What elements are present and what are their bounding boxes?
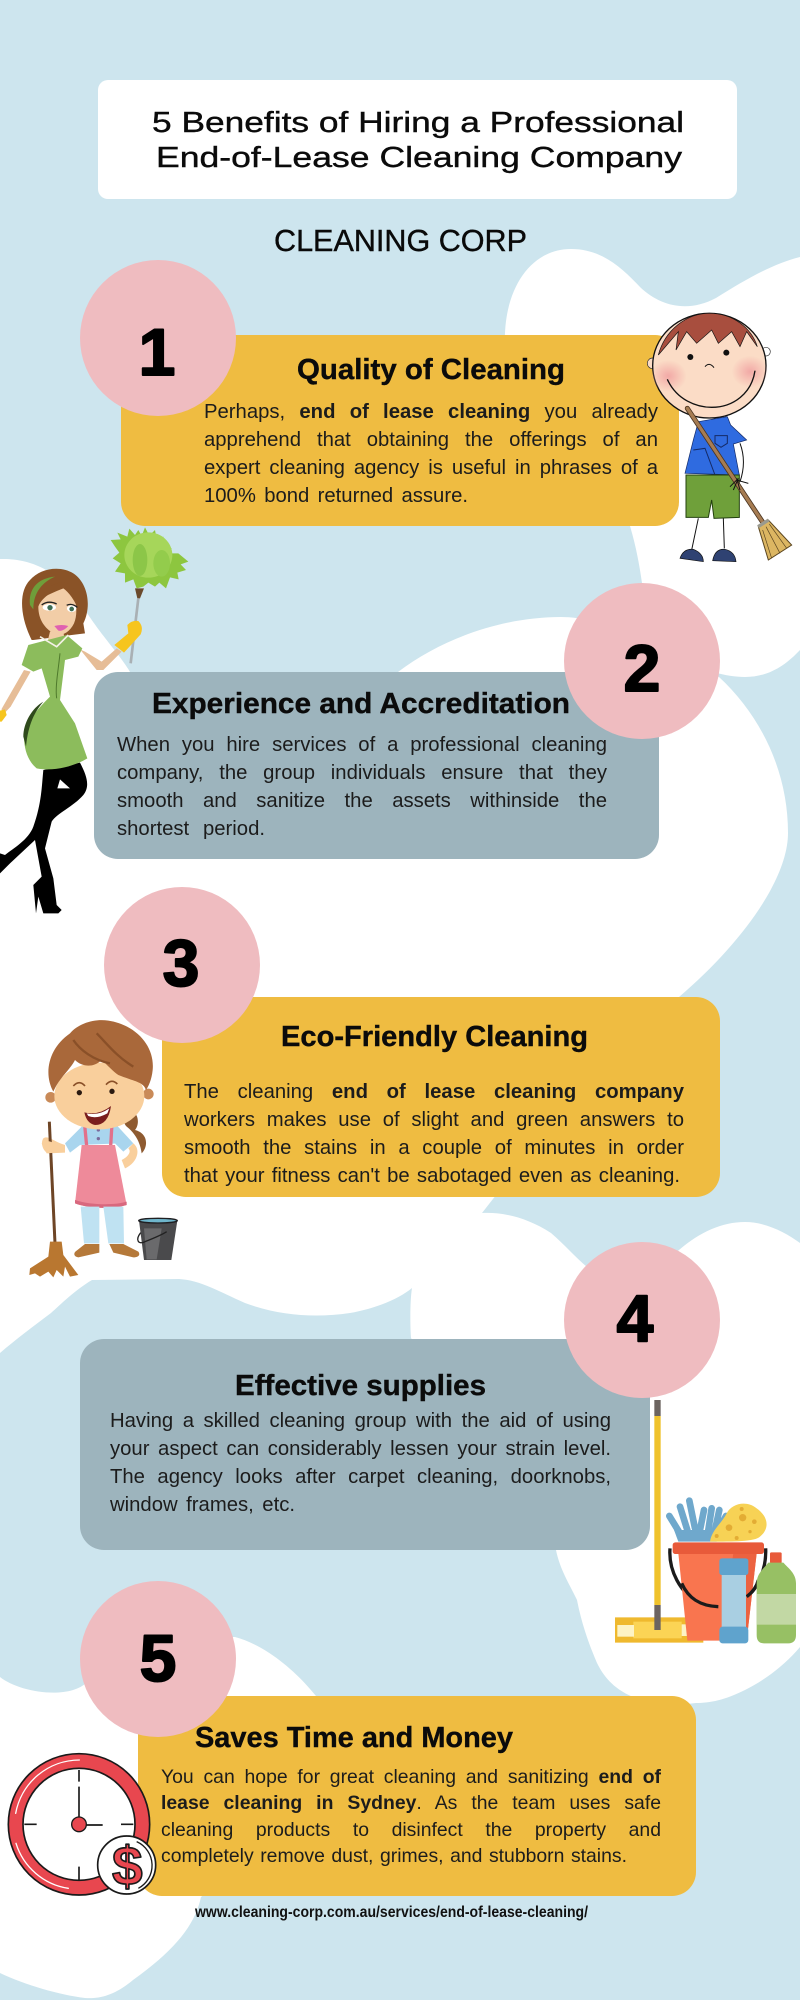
text: experience and accreditation (117, 734, 607, 840)
icon: clock with dollar coin: $ (112, 1835, 143, 1897)
text: quality of cleaning (204, 401, 658, 507)
number badge 1 (80, 260, 236, 416)
number badge 4: 4 (617, 1281, 654, 1355)
website url: www.cleaning-corp.com.au/services/end-of-lease-cleaning/ (194, 1904, 589, 1921)
panel: experience and accreditation (94, 672, 659, 859)
text: effective supplies: window frames, etc. (110, 1494, 295, 1516)
text: eco-friendly cleaning (184, 1081, 684, 1187)
heading: saves time and money: Saves Time and Money (195, 1722, 513, 1754)
text: eco-friendly cleaning: The cleaning end of lease cleaning company (184, 1081, 684, 1103)
text: saves time and money: lease cleaning in Sydney. As the team uses safe (161, 1792, 661, 1814)
panel: eco-friendly cleaning (162, 997, 720, 1197)
panel: effective supplies (80, 1339, 650, 1550)
number badge 2: 2 (624, 631, 660, 705)
text: eco-friendly cleaning: workers makes use of slight and green answers to (184, 1109, 684, 1131)
text: eco-friendly cleaning: smooth the stains in a couple of minutes in order (184, 1137, 684, 1159)
text: saves time and money (161, 1766, 661, 1867)
panel: quality of cleaning (121, 335, 679, 526)
text: experience and accreditation: shortest period. (117, 818, 265, 840)
illustration: mop, bucket and cleaning supplies (615, 1400, 796, 1644)
heading: effective supplies: Effective supplies (235, 1370, 486, 1402)
text: effective supplies: The agency looks after carpet cleaning, doorknobs, (110, 1466, 611, 1488)
text: experience and accreditation: smooth and sanitize the assets withinside the (117, 790, 607, 812)
heading: experience and accreditation: Experience and Accreditation (152, 688, 570, 720)
text: effective supplies: Having a skilled cleaning group with the aid of using (110, 1410, 611, 1432)
brand name: CLEANING CORP (274, 223, 527, 258)
text: experience and accreditation: company, the group individuals ensure that they (117, 762, 607, 784)
number badge 3 (104, 887, 260, 1043)
text: quality of cleaning: apprehend that obtaining the offerings of an (204, 429, 658, 451)
number badge 5: 5 (140, 1621, 176, 1695)
text: experience and accreditation: When you hire services of a professional cleaning (117, 734, 607, 756)
text: quality of cleaning: 100% bond returned assure. (204, 485, 468, 507)
text: saves time and money: You can hope for great cleaning and sanitizing end of (161, 1766, 661, 1788)
number badge 1: 1 (139, 315, 175, 389)
illustration: girl with mop and bucket (29, 1020, 178, 1278)
text: saves time and money: cleaning products to disinfect the property and (161, 1819, 661, 1841)
text: effective supplies (110, 1410, 611, 1516)
text: eco-friendly cleaning: that your fitness can't be sabotaged even as cleaning. (184, 1165, 680, 1187)
text: quality of cleaning: expert cleaning agency is useful in phrases of a (204, 457, 658, 479)
text: saves time and money: completely remove dust, grimes, and stubborn stains. (161, 1845, 627, 1867)
heading: eco-friendly cleaning: Eco-Friendly Cleaning (281, 1021, 588, 1053)
title text (152, 107, 684, 174)
title text: End-of-Lease Cleaning Company (156, 142, 683, 174)
text: quality of cleaning: Perhaps, end of lease cleaning you already (204, 401, 658, 423)
illustration: woman with duster (0, 528, 188, 914)
text: effective supplies: your aspect can considerably lessen your strain level. (110, 1438, 611, 1460)
title text: 5 Benefits of Hiring a Professional (152, 107, 684, 139)
panel: saves time and money (138, 1696, 696, 1896)
number badge 3: 3 (163, 926, 199, 1000)
illustration: boy with broom (647, 312, 792, 562)
number badge 5 (80, 1581, 236, 1737)
number badge 4 (564, 1242, 720, 1398)
number badge 2 (564, 583, 720, 739)
title box (98, 80, 737, 199)
icon: clock with dollar coin (8, 1752, 156, 1897)
heading: quality of cleaning: Quality of Cleaning (297, 354, 565, 386)
